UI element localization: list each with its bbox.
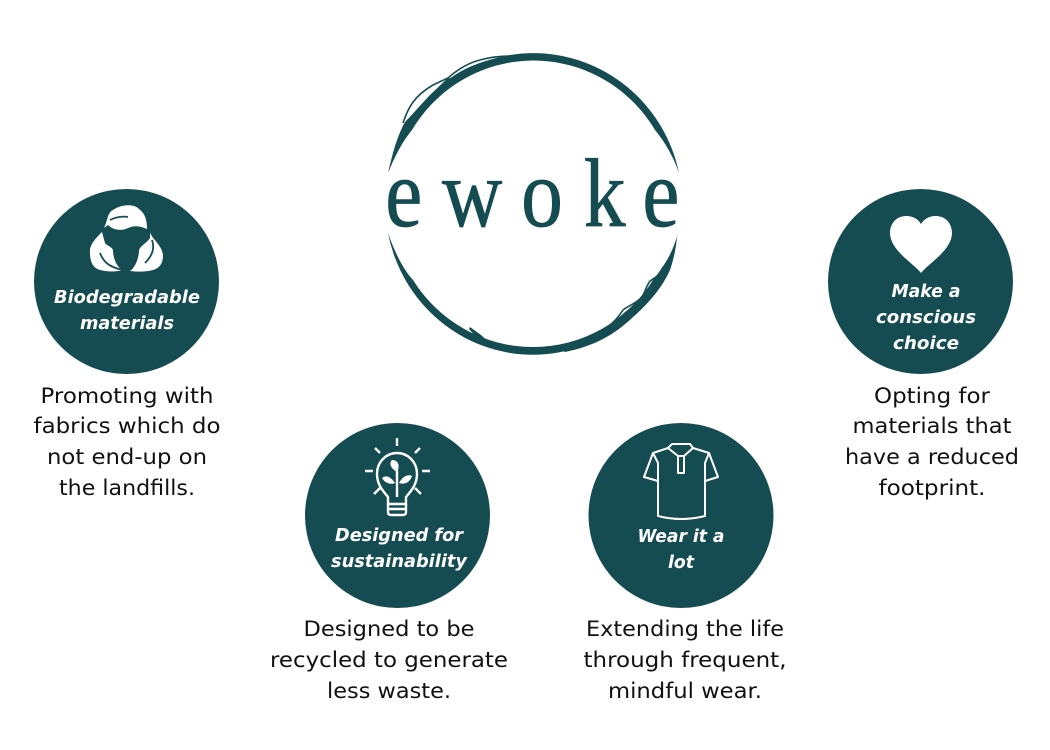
description: not end-up on	[47, 445, 207, 469]
description	[584, 617, 786, 703]
description: Extending the life	[586, 617, 784, 641]
description: Promoting with	[40, 384, 214, 408]
circle badge	[34, 189, 219, 374]
circle badge	[828, 189, 1013, 374]
heading: Designed for	[335, 525, 464, 546]
heading: Make a	[892, 281, 960, 302]
panel: designed for sustainability: sustainability	[331, 551, 468, 572]
icon: polo shirt	[644, 444, 718, 519]
description: have a reduced	[845, 445, 1019, 469]
description: Designed to be	[304, 617, 474, 641]
icon: three leaves	[90, 205, 163, 272]
icon: light bulb with plant	[365, 438, 430, 515]
logo: ewoke ring and wordmark	[385, 53, 679, 355]
description: recycled to generate	[270, 648, 508, 672]
description: mindful wear.	[608, 679, 762, 703]
circle badge	[305, 423, 490, 608]
description: through frequent,	[584, 648, 786, 672]
heading: Biodegradable	[54, 287, 200, 308]
logo ring	[388, 53, 679, 355]
panel: make a conscious choice: conscious	[876, 307, 976, 328]
circle badge	[588, 423, 774, 608]
panel: designed for sustainability	[270, 423, 508, 703]
description: fabrics which do	[34, 414, 220, 438]
panel: biodegradable materials	[34, 189, 220, 500]
description: footprint.	[878, 476, 986, 500]
description	[34, 384, 220, 500]
description: materials that	[852, 414, 1012, 438]
panel: make a conscious choice	[828, 189, 1019, 500]
panel: make a conscious choice: choice	[893, 333, 959, 354]
heading: Wear it a	[638, 526, 724, 547]
panel: biodegradable materials: materials	[80, 313, 174, 334]
logo wordmark: ewoke	[385, 139, 679, 247]
description	[845, 384, 1019, 500]
description: Opting for	[874, 384, 990, 408]
panel: wear it a lot: lot	[668, 552, 695, 573]
description: the landfills.	[59, 476, 195, 500]
description	[270, 617, 508, 703]
icon: heart	[890, 216, 952, 273]
panel: wear it a lot	[584, 423, 786, 703]
description: less waste.	[327, 679, 451, 703]
